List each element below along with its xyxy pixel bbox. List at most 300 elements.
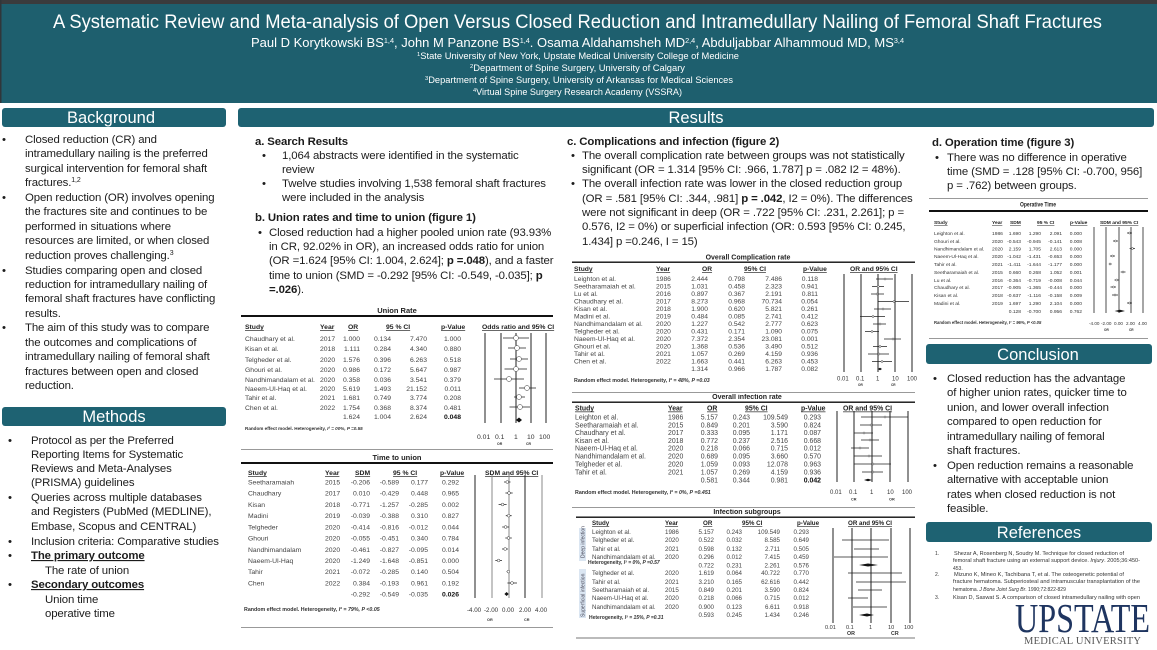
chart: operative time: Study — [934, 220, 948, 226]
forest plot: time to union: 4.00 — [535, 607, 548, 614]
chart: overall infection rate: 109.549 — [763, 414, 788, 422]
chart: overall infection rate: 0.042 — [804, 478, 821, 484]
chart: operative time: Naeem-Ul-Haq et al. — [934, 254, 979, 260]
forest plot: union rate: 10 — [527, 434, 535, 441]
header band — [0, 0, 1157, 103]
chart: overall complication rate: 2.191 — [765, 291, 782, 298]
chart: union rate: Kisan et al. — [245, 346, 279, 353]
chart: operative time: -0.543 — [1007, 239, 1021, 245]
text: search results: • — [262, 150, 266, 162]
chart: overall infection rate: 1.171 — [771, 430, 788, 437]
chart: overall infection rate: 0.581 — [701, 478, 718, 484]
chart: infection subgroups: 0.593 — [699, 612, 715, 619]
forest plot: operative time: 2.00 — [1126, 321, 1135, 326]
chart: overall infection rate: 2017 — [668, 430, 683, 437]
forest plot: infection subgroups: 1 — [869, 625, 872, 631]
chart: time to union: Random effect model. Heterogeneity, I² = 79%, P <0.05 — [244, 607, 381, 613]
chart: operative time: Kisan et al. — [934, 293, 958, 299]
forest plot: infection subgroups: 0.1 — [846, 625, 854, 631]
methods text: • — [8, 536, 12, 548]
chart: infection subgroups: 0.064 — [727, 570, 743, 577]
forest plot: operative time: -2.00 — [1101, 321, 1112, 326]
chart: union rate: 0.986 — [343, 367, 360, 374]
chart: union rate: 4.340 — [410, 346, 427, 353]
chart: infection subgroups: 0.649 — [794, 537, 810, 544]
chart: infection subgroups: Telgheder et al. — [592, 537, 635, 544]
chart: overall complication rate: 0.085 — [728, 314, 745, 320]
chart: operative time: 2019 — [992, 301, 1003, 307]
chart: overall infection rate: Telgheder et al. — [575, 462, 622, 468]
chart: overall infection rate: 0.087 — [804, 430, 821, 437]
chart: time to union: 2020 — [325, 558, 340, 565]
forest plot: operative time: 0.00 — [1114, 321, 1123, 326]
chart: union rate: 1.681 — [343, 395, 360, 402]
chart: overall complication rate: Lu et al. — [574, 291, 598, 298]
chart: infection subgroups: 0.849 — [699, 587, 715, 594]
methods text: Embase, Scopus and CENTRAL) — [31, 521, 196, 533]
chart: time to union: -0.193 — [380, 580, 399, 588]
chart: operative time: p-Value — [1070, 220, 1088, 226]
chart: operative time: 95 % CI — [1037, 220, 1055, 226]
text: operation time — [932, 137, 1142, 192]
chart: union rate: 2020 — [320, 367, 335, 374]
chart: overall complication rate: 2022 — [656, 358, 671, 366]
chart: union rate: Tahir et al. — [245, 395, 276, 402]
panel: conclusion — [926, 344, 1152, 515]
chart: overall complication rate: Ghouri et al. — [574, 344, 611, 350]
text: complications: c. Complications and infection (figure 2) — [567, 136, 779, 148]
chart: overall infection rate: 0.981 — [771, 478, 788, 484]
chart: overall complication rate: 7.486 — [765, 276, 782, 283]
chart: overall infection rate: 0.570 — [804, 454, 821, 460]
affiliations: 1 — [417, 52, 420, 58]
chart: union rate: Chaudhary et al. — [245, 336, 295, 343]
conclusion text: Open reduction remains a reasonable — [947, 460, 1133, 472]
chart: operative time: 0.128 — [1009, 309, 1021, 315]
chart: infection subgroups: 0.722 — [699, 562, 715, 570]
chart: infection subgroups: 2021 — [665, 579, 679, 586]
chart: union rate: 3.541 — [410, 377, 427, 384]
chart: overall complication rate: 23.081 — [762, 336, 782, 343]
chart: overall complication rate: OR — [702, 266, 712, 273]
chart: overall complication rate: 0.269 — [728, 351, 745, 358]
chart: operative time: Nandhimandalam et al. — [934, 246, 984, 252]
chart: union rate: 21.152 — [406, 386, 427, 393]
methods text: Protocol as per the Preferred — [31, 435, 174, 447]
chart: overall complication rate: 0.536 — [728, 344, 745, 350]
text: union rates: b. Union rates and time to union (figure 1) — [255, 212, 476, 224]
chart: infection subgroups: Heterogeneity, I² = 15%, P =0.31 — [589, 615, 664, 621]
chart: operative time: 0.001 — [1070, 270, 1082, 276]
chart: time to union: -1.257 — [380, 502, 399, 509]
forest plot: time to union: -4.00 — [467, 607, 482, 614]
chart: operative time: 1.690 — [1009, 231, 1021, 237]
chart: infection subgroups: 6.611 — [765, 604, 781, 611]
authors: . Osama Aldahamsheh MD — [530, 36, 685, 50]
conclusion text: shaft fractures. — [947, 445, 1020, 457]
chart: union rate: Random effect model. Heterogeneity, I² = 00%, P =0.55 — [245, 426, 363, 431]
forest plot: union rate: 0.01 — [477, 434, 490, 441]
chart: infection subgroups: 2020 — [665, 554, 679, 561]
chart: operative time: 2016 — [992, 278, 1003, 284]
chart: time to union: 0.965 — [442, 490, 459, 498]
chart: time to union: 0.177 — [411, 480, 428, 486]
chart: infection subgroups: Tahir et al. — [592, 546, 621, 553]
chart: infection subgroups: 0.900 — [699, 604, 715, 611]
chart: time to union: 95 % CI — [393, 470, 417, 477]
chart: overall complication rate: 1.090 — [765, 328, 782, 336]
chart: operative time: 0.000 — [1070, 285, 1082, 291]
title: A Systematic Review and Meta-analysis of Open Versus Closed Reduction and Intramedullary Nailing of Femoral Shaft Fractures — [53, 12, 1102, 33]
chart: infection subgroups: Study — [592, 520, 610, 527]
chart: time to union: 2022 — [325, 580, 340, 588]
chart: operative time: 2018 — [992, 293, 1003, 299]
chart: infection subgroups: 2015 — [665, 587, 679, 594]
heading: results — [238, 108, 1154, 127]
chart: overall complication rate: 0.968 — [728, 298, 745, 306]
chart: infection subgroups: 62.616 — [761, 579, 781, 586]
chart: overall infection rate: Naeem-Ul-Haq et al. — [575, 446, 638, 452]
chart: operative time: 1.290 — [1029, 301, 1041, 307]
background text: the fractures site and continues to be — [25, 206, 207, 218]
chart: overall complication rate: 0.936 — [801, 351, 818, 358]
text: operation time: d. Operation time (figure 3) — [932, 137, 1075, 149]
chart: overall infection rate: Kisan et al. — [575, 438, 609, 445]
chart: time to union: 2020 — [325, 536, 340, 542]
chart: operative time: 2.613 — [1050, 246, 1062, 252]
chart: union rate: 0.048 — [444, 414, 461, 421]
chart: union rate: 8.374 — [410, 405, 427, 412]
chart: overall complication rate: 0.897 — [691, 291, 708, 298]
chart: infection subgroups: 0.201 — [727, 587, 743, 594]
methods text: and Registers (PubMed (MEDLINE), — [31, 506, 211, 518]
chart: operative time: Lu et al. — [934, 278, 951, 284]
background text: results. — [25, 308, 61, 320]
chart: overall complication rate: 0.118 — [802, 276, 818, 283]
forest plot: infection subgroups: OR — [847, 631, 855, 637]
chart: overall infection rate: 0.772 — [701, 438, 718, 445]
methods text: • — [8, 492, 12, 504]
heading: conclusion: Conclusion — [997, 346, 1079, 364]
chart: operative time: 2.159 — [1009, 246, 1021, 252]
chart: infection subgroups: Telgheder et al. — [592, 570, 635, 577]
chart: union rate: 2.624 — [410, 414, 427, 421]
chart: infection subgroups: 0.123 — [727, 604, 743, 611]
chart: overall infection rate: Chaudhary et al. — [575, 430, 626, 437]
chart: operative time: 0.000 — [1070, 231, 1082, 237]
conclusion text: • — [933, 373, 937, 385]
chart: union rate: 0.481 — [444, 405, 461, 412]
reference list — [935, 551, 1140, 601]
forest plot: union rate: 0.1 — [495, 434, 505, 441]
chart: operative time: 0.000 — [1070, 262, 1082, 268]
chart: overall infection rate: 0.066 — [733, 446, 750, 452]
chart: union rate: 2018 — [320, 346, 335, 353]
chart: infection subgroups: OR and 95% CI — [848, 520, 892, 527]
chart: overall infection rate: Leighton et al. — [575, 414, 618, 422]
chart: time to union: 0.140 — [411, 569, 428, 576]
chart: overall complication rate: Study — [574, 266, 593, 273]
heading: references: References — [997, 524, 1081, 542]
chart: time to union: 0.310 — [411, 513, 428, 520]
text: union rates: in CR, 92.02% in OR), an increased odds ratio for union — [269, 241, 544, 253]
conclusion text: alternative with acceptable union — [947, 474, 1108, 486]
chart: infection subgroups: 0.231 — [727, 562, 743, 570]
text: operation time: There was no difference in operative — [947, 152, 1127, 164]
chart: union rate: Year — [320, 324, 335, 331]
panel: results — [238, 108, 1154, 638]
affiliations: 4 — [473, 88, 476, 94]
chart: time to union: -0.285 — [380, 569, 399, 576]
forest plot: operative time: -4.00 — [1089, 321, 1100, 326]
chart: union rate: 0.036 — [374, 377, 391, 384]
chart: overall infection rate: 0.715 — [771, 446, 788, 452]
chart: overall complication rate: 1.663 — [691, 358, 708, 366]
chart: overall complication rate: 1986 — [656, 276, 671, 283]
authors: , John M Panzone BS — [394, 36, 520, 50]
chart: union rate: 0.368 — [374, 405, 391, 412]
chart: overall complication rate: Kisan et al. — [574, 306, 607, 313]
chart: time to union: -0.055 — [351, 536, 370, 542]
chart: overall complication rate: Nandhimandalam et al. — [574, 321, 643, 328]
chart: time to union: -1.648 — [380, 558, 399, 565]
background text: fractures between open and closed — [25, 366, 198, 378]
chart: operative time: 0.000 — [1070, 246, 1082, 252]
chart: union rate: 1.000 — [343, 336, 360, 343]
chart: overall complication rate: Chaudhary et al. — [574, 298, 623, 306]
chart: overall complication rate: OR and 95% CI — [850, 266, 898, 273]
chart: operative time: 2015 — [992, 270, 1003, 276]
chart: union rate: Nandhimandalam et al. — [245, 377, 315, 384]
text: complications: The overall complication rate between groups was not statistically — [582, 150, 905, 162]
text: complications: The overall infection rate was lower in the closed reduction group — [582, 178, 902, 190]
chart: time to union — [241, 453, 553, 628]
chart: time to union: -1.249 — [351, 558, 370, 565]
authors: 1,4 — [384, 38, 394, 45]
chart: infection subgroups: Tahir et al. — [592, 579, 621, 586]
forest plot: time to union: 0.00 — [502, 607, 515, 614]
forest plot: overall complication rate: 0.01 — [837, 376, 849, 382]
chart: overall infection rate: 0.095 — [733, 430, 750, 437]
forest plot: infection subgroups: 100 — [904, 625, 913, 631]
chart: union rate: 1.493 — [374, 386, 391, 393]
chart: union rate: 2020 — [320, 386, 335, 393]
text: union rates: (OR =1.624 [95% CI: 1.004, 2.624]; p =.048), and a faster — [269, 255, 554, 267]
forest plot: union rate: OR — [497, 442, 503, 446]
chart: union rate: 0.880 — [444, 346, 461, 353]
chart: operative time: -0.158 — [1048, 293, 1062, 299]
chart: infection subgroups: OR — [703, 520, 713, 527]
forest plot: overall infection rate: 0.1 — [849, 490, 858, 496]
forest plot: time to union: CR — [524, 618, 530, 622]
chart: overall infection rate: 0.936 — [804, 470, 821, 476]
chart: overall complication rate: Chen et al. — [574, 358, 606, 366]
chart: time to union: Chen — [248, 580, 264, 588]
conclusion text: of higher union rates, quicker time to — [947, 387, 1127, 399]
chart: overall complication rate: 2.323 — [765, 284, 782, 290]
chart: operative time: -0.637 — [1007, 293, 1021, 299]
chart: time to union: -0.549 — [380, 592, 399, 598]
chart: overall complication rate: 2.777 — [765, 321, 782, 328]
chart: overall complication rate: 0.001 — [801, 336, 818, 343]
chart: union rate: 3.774 — [410, 395, 427, 402]
chart: union rate: Chen et al. — [245, 405, 278, 412]
chart: infection subgroups: Seetharamaiah et al. — [592, 587, 649, 594]
chart: overall complication rate: Telgheder et al. — [574, 328, 620, 336]
text: union rates: • — [258, 227, 262, 239]
heading: methods — [2, 407, 226, 426]
affiliations: Department of Spine Surgery, University of Arkansas for Medical Sciences — [428, 75, 734, 85]
chart: infection subgroups: 0.243 — [727, 529, 743, 536]
chart: time to union: -0.035 — [409, 592, 428, 598]
chart: overall infection rate: 2015 — [668, 422, 683, 430]
chart: operative time: -1.365 — [1027, 285, 1041, 291]
chart: infection subgroups: 7.415 — [765, 554, 781, 561]
chart: overall complication rate: 2020 — [656, 336, 671, 343]
chart: overall complication rate: 0.412 — [801, 314, 818, 320]
background text: Open reduction (OR) involves opening — [25, 192, 214, 204]
chart: union rate: 2017 — [320, 336, 335, 343]
background text: • — [2, 134, 6, 146]
chart: overall infection rate: 0.012 — [804, 446, 821, 452]
chart: time to union: 0.000 — [442, 558, 459, 565]
methods text: Secondary outcomes — [31, 579, 144, 591]
chart: time to union: 2017 — [325, 490, 340, 498]
background text: Closed reduction (CR) and — [25, 134, 157, 146]
forest plot: overall infection rate: CR — [851, 498, 857, 502]
affiliations: Department of Spine Surgery, University of Calgary — [473, 63, 686, 73]
chart: infection subgroups: 0.442 — [794, 579, 810, 586]
chart: overall complication rate: 0.453 — [801, 358, 818, 366]
background text: intramedullary nailing is the preferred — [25, 148, 208, 160]
chart: overall infection rate: Seetharamaiah et al. — [575, 422, 639, 430]
chart: time to union: 0.002 — [442, 502, 459, 509]
chart: operative time: -1.431 — [1027, 254, 1041, 260]
chart: overall infection rate: Nandhimandalam et al. — [575, 454, 646, 460]
reference list: Mizuno K, Mineo K, Tachibana T, et al. The osteogenetic potential of — [954, 572, 1125, 578]
chart: overall complication rate: 1.057 — [691, 351, 708, 358]
chart: union rate: Study — [245, 324, 264, 331]
chart: overall complication rate: 0.542 — [728, 321, 745, 328]
chart: operative time: Year — [992, 220, 1002, 226]
chart: union rate: 1.576 — [343, 357, 360, 364]
chart: operative time: 0.660 — [1009, 270, 1021, 276]
conclusion text: compared to open reduction for — [947, 416, 1102, 428]
chart: overall infection rate: 4.159 — [771, 470, 788, 476]
chart: overall infection rate: 1986 — [668, 414, 683, 422]
chart: overall complication rate: 2020 — [656, 344, 671, 350]
chart: infection subgroups: Year — [665, 520, 679, 527]
affiliations: State University of New York, Upstate Medical University College of Medicine — [420, 51, 739, 61]
chart: overall infection rate: 0.293 — [804, 414, 821, 422]
affiliations: 3 — [425, 76, 428, 82]
chart: operative time: Chaudhary et al. — [934, 285, 970, 291]
forest plot: operative time: 4.00 — [1138, 321, 1147, 326]
chart: time to union: 0.010 — [353, 490, 370, 498]
chart: operative time: 0.009 — [1070, 293, 1082, 299]
chart: overall complication rate: Naeem-Ul-Haq et al. — [574, 336, 635, 343]
chart: union rate: 0.358 — [343, 377, 360, 384]
text: operation time: p = .762) between groups. — [947, 180, 1077, 192]
chart: overall complication rate: 95% CI — [744, 266, 766, 273]
chart: union rate: 0.134 — [374, 336, 391, 343]
forest plot: overall complication rate: 0.1 — [856, 376, 865, 382]
forest plot: union rate: 1 — [514, 434, 518, 441]
chart: overall complication rate: 0.623 — [801, 321, 818, 328]
chart: overall complication rate: 1.227 — [691, 321, 708, 328]
forest plot: time to union: -2.00 — [484, 607, 499, 614]
chart: infection subgroups: 3.210 — [699, 579, 715, 586]
label: deep infection: Deep infection — [580, 526, 586, 558]
reference list: 3. — [935, 595, 939, 601]
text: search results: Twelve studies involving 1,538 femoral shaft fractures — [282, 178, 546, 190]
background text: • — [2, 322, 6, 334]
chart: overall complication rate: 7.372 — [691, 336, 708, 343]
forest plot: time to union: OR — [487, 618, 493, 622]
chart: overall infection rate — [572, 394, 915, 508]
chart: overall infection rate: 1.057 — [701, 470, 718, 476]
chart: time to union: -0.206 — [351, 480, 370, 486]
chart: operative time: -0.364 — [1007, 278, 1021, 284]
chart: overall infection rate: 0.218 — [701, 446, 718, 452]
methods text: operative time — [45, 608, 115, 620]
chart: infection subgroups: 0.066 — [727, 595, 743, 602]
chart: infection subgroups: 0.293 — [794, 529, 810, 536]
chart: infection subgroups: Nandhimandalam et al. — [592, 604, 656, 611]
chart: union rate: p-Value — [441, 324, 465, 331]
chart: overall complication rate: Random effect model. Heterogeneity, I² = 48%, P =0.03 — [574, 378, 710, 384]
label: superficial infection: Superficial infection — [580, 573, 586, 617]
chart: operative time: -1.644 — [1027, 262, 1041, 268]
chart: overall complication rate: 1.314 — [691, 366, 708, 373]
chart: time to union: 0.192 — [442, 580, 459, 588]
chart: union rate: 0.379 — [444, 377, 461, 384]
chart: infection subgroups: 40.722 — [761, 570, 781, 577]
chart: time to union: -0.827 — [380, 547, 399, 554]
forest plot: overall infection rate: OR — [889, 498, 895, 502]
forest plot: overall infection rate: 0.01 — [830, 490, 842, 496]
text: union rates: time to union (SMD = -0.292 [95% CI: -0.549, -0.035]; p — [269, 270, 543, 282]
chart: overall infection rate: Year — [668, 406, 683, 412]
chart: infection subgroups: 0.459 — [794, 554, 810, 561]
heading: methods: Methods — [82, 408, 146, 426]
chart: time to union: 2018 — [325, 502, 340, 509]
chart: infection subgroups: 0.715 — [765, 595, 781, 602]
chart: operative time: SDM — [1010, 220, 1021, 226]
forest plot: union rate: CR — [526, 442, 532, 446]
chart: operative time: Random effect model. Heterogeneity, I² = 96%, P <0.05 — [934, 320, 1042, 325]
chart: operative time: 1.705 — [1029, 246, 1041, 252]
chart: overall complication rate: 0.431 — [691, 328, 708, 336]
methods text: • — [8, 435, 12, 447]
text: search results — [255, 136, 546, 204]
affiliations — [417, 51, 739, 97]
chart: infection subgroups: 95% CI — [742, 520, 763, 527]
background text: resources are limited, or when closed — [25, 235, 209, 247]
chart: overall infection rate: 0.095 — [733, 454, 750, 460]
chart: infection subgroups: 2020 — [665, 604, 679, 611]
chart: operative time: 2021 — [992, 262, 1003, 268]
forest plot: infection subgroups: 0.01 — [825, 625, 836, 631]
chart: union rate: 2020 — [320, 377, 335, 384]
chart: overall complication rate: Madini et al. — [574, 314, 610, 320]
chart: time to union: 0.384 — [353, 580, 370, 588]
text: complications — [567, 136, 913, 248]
heading: background: Background — [67, 109, 155, 127]
reference list: 1. — [935, 551, 939, 557]
background text: reduction proves challenging. — [25, 250, 170, 262]
chart: infection subgroups: 0.245 — [727, 612, 743, 619]
